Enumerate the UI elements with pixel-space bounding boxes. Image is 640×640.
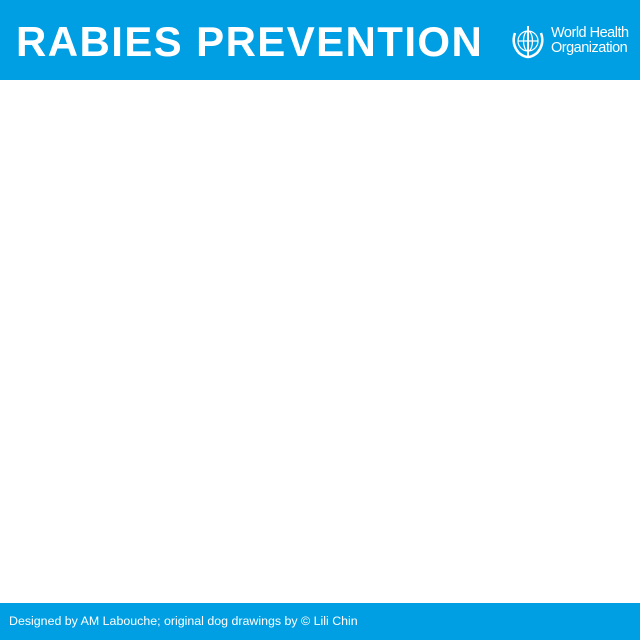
footer bar [0,603,640,640]
organization name [551,25,629,56]
organization name: Organization [551,40,627,56]
title: RABIES PREVENTION [16,18,483,65]
icon: WHO emblem [512,26,544,58]
WHO logo [512,25,629,58]
organization name: World Health [551,25,629,41]
header bar [0,0,640,80]
credits text: Designed by AM Labouche; original dog drawings by © Lili Chin [9,614,358,628]
